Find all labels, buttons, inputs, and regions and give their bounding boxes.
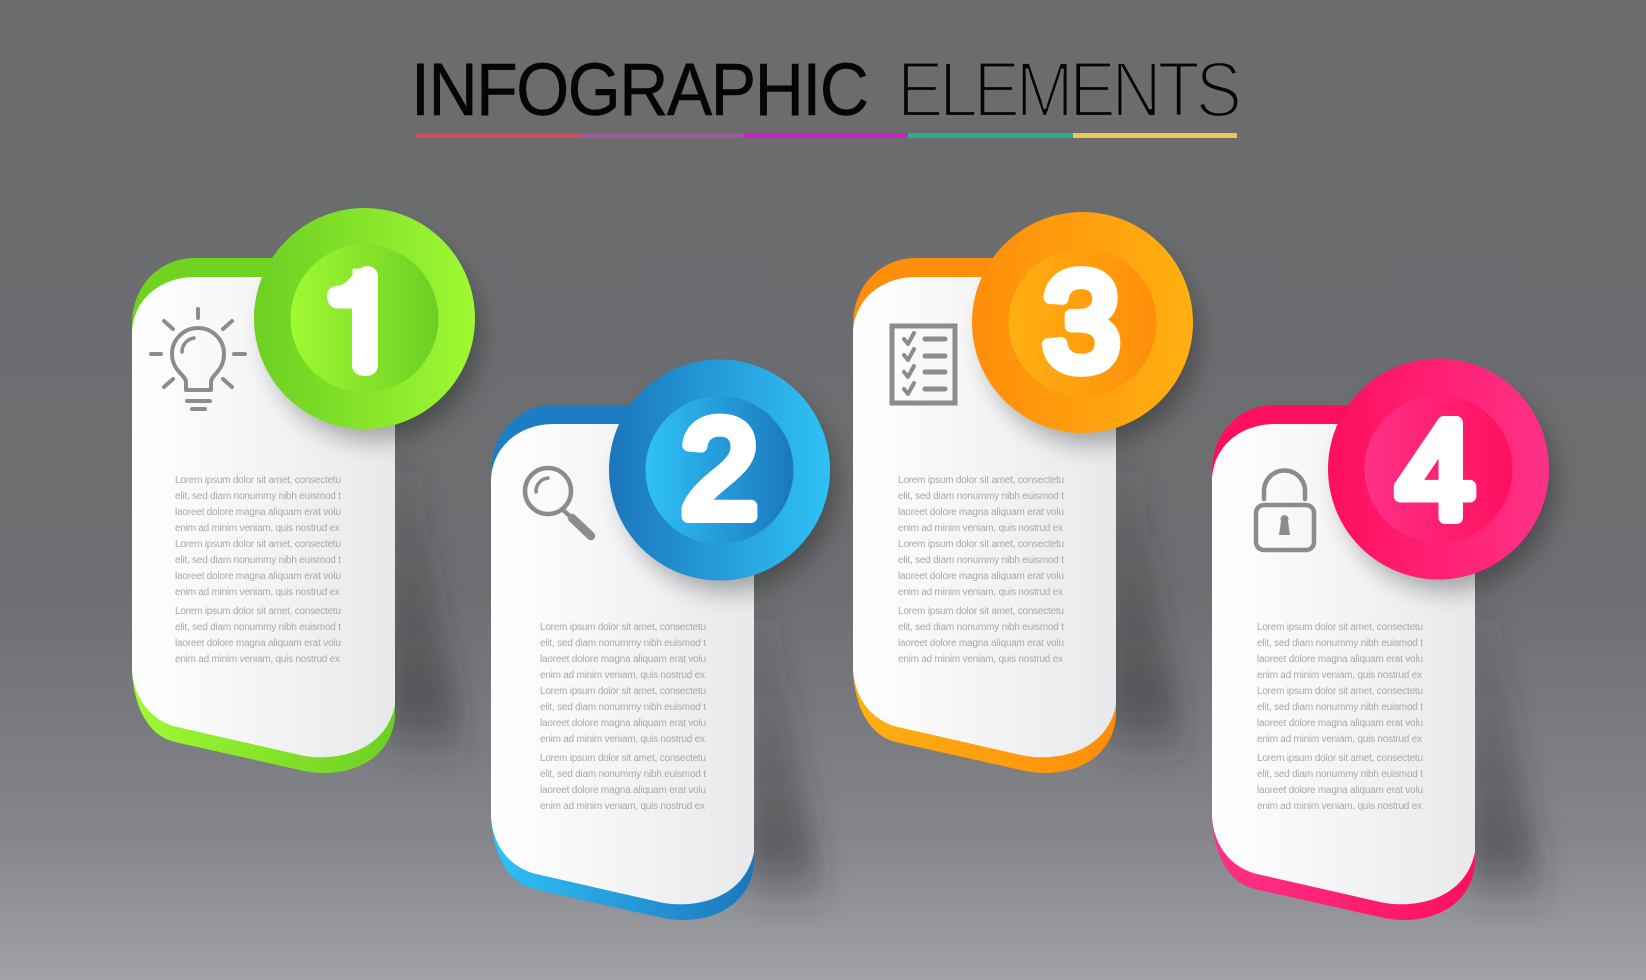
text block: elit, sed diam nonummy nibh euismod t bbox=[175, 555, 341, 566]
text block: enim ad minim veniam, quis nostrud ex bbox=[898, 587, 1063, 598]
text block: Lorem ipsum dolor sit amet, consectetu bbox=[1257, 753, 1423, 764]
panel white face bbox=[132, 277, 395, 757]
text block: enim ad minim veniam, quis nostrud ex bbox=[1257, 801, 1422, 812]
text block: elit, sed diam nonummy nibh euismod t bbox=[175, 491, 341, 502]
text block: laoreet dolore magna aliquam erat volu bbox=[175, 571, 341, 582]
panel bottom edge bbox=[853, 650, 1116, 773]
panel white face bbox=[491, 424, 754, 904]
text block: elit, sed diam nonummy nibh euismod t bbox=[898, 491, 1064, 502]
panel shadow bbox=[744, 587, 829, 917]
badge: number 1: 1 bbox=[320, 246, 397, 400]
text block: Lorem ipsum dolor sit amet, consectetu bbox=[898, 606, 1064, 617]
text block: Lorem ipsum dolor sit amet, consectetu bbox=[540, 753, 706, 764]
text block: Lorem ipsum dolor sit amet, consectetu bbox=[175, 539, 341, 550]
text block bbox=[898, 475, 1064, 665]
text block: laoreet dolore magna aliquam erat volu bbox=[898, 638, 1064, 649]
badge: number 4 bbox=[1328, 358, 1554, 591]
text block bbox=[540, 622, 706, 812]
text block: laoreet dolore magna aliquam erat volu bbox=[1257, 718, 1423, 729]
panel coloured back bbox=[491, 405, 754, 920]
text block: laoreet dolore magna aliquam erat volu bbox=[540, 654, 706, 665]
text block: Lorem ipsum dolor sit amet, consectetu bbox=[1257, 686, 1423, 697]
text block: laoreet dolore magna aliquam erat volu bbox=[540, 718, 706, 729]
panel bottom edge bbox=[1212, 797, 1475, 920]
icon: light bulb bbox=[151, 309, 245, 409]
panel shadow bbox=[1106, 440, 1191, 770]
text block: elit, sed diam nonummy nibh euismod t bbox=[898, 622, 1064, 633]
text block: enim ad minim veniam, quis nostrud ex bbox=[898, 654, 1063, 665]
panel: step 2 bbox=[491, 405, 829, 920]
panel white face bbox=[853, 277, 1116, 757]
panel bottom edge bbox=[491, 797, 754, 920]
text block: enim ad minim veniam, quis nostrud ex bbox=[1257, 670, 1422, 681]
text block: laoreet dolore magna aliquam erat volu bbox=[1257, 785, 1423, 796]
text block: enim ad minim veniam, quis nostrud ex bbox=[175, 654, 340, 665]
badge: number 2 bbox=[609, 360, 836, 592]
badge: number 3: 3 bbox=[1043, 245, 1120, 399]
text block: elit, sed diam nonummy nibh euismod t bbox=[898, 555, 1064, 566]
text block: elit, sed diam nonummy nibh euismod t bbox=[540, 638, 706, 649]
title word: ELEMENTS: ELEMENTS bbox=[897, 46, 1240, 134]
icon: checklist bbox=[892, 326, 955, 403]
text block: laoreet dolore magna aliquam erat volu bbox=[898, 571, 1064, 582]
text block: elit, sed diam nonummy nibh euismod t bbox=[1257, 769, 1423, 780]
badge: number 3 bbox=[972, 212, 1198, 444]
text block: enim ad minim veniam, quis nostrud ex bbox=[540, 734, 705, 745]
text block: Lorem ipsum dolor sit amet, consectetu bbox=[898, 475, 1064, 486]
badge: number 2: 2 bbox=[681, 392, 758, 546]
text block: elit, sed diam nonummy nibh euismod t bbox=[540, 702, 706, 713]
text block: laoreet dolore magna aliquam erat volu bbox=[175, 638, 341, 649]
text block: Lorem ipsum dolor sit amet, consectetu bbox=[898, 539, 1064, 550]
text block: laoreet dolore magna aliquam erat volu bbox=[898, 507, 1064, 518]
text block: enim ad minim veniam, quis nostrud ex bbox=[175, 523, 340, 534]
text block: elit, sed diam nonummy nibh euismod t bbox=[175, 622, 341, 633]
panel shadow bbox=[385, 440, 470, 770]
text block: Lorem ipsum dolor sit amet, consectetu bbox=[1257, 622, 1423, 633]
title underline bbox=[416, 133, 1237, 138]
panel bottom edge bbox=[132, 650, 395, 773]
icon: magnifying glass bbox=[525, 468, 591, 536]
text block: enim ad minim veniam, quis nostrud ex bbox=[1257, 734, 1422, 745]
text block: elit, sed diam nonummy nibh euismod t bbox=[1257, 638, 1423, 649]
text block: Lorem ipsum dolor sit amet, consectetu bbox=[540, 622, 706, 633]
panel coloured back bbox=[132, 258, 395, 773]
panel white face bbox=[1212, 424, 1475, 904]
panel shadow bbox=[1465, 587, 1550, 917]
panel coloured back bbox=[853, 258, 1116, 773]
text block: Lorem ipsum dolor sit amet, consectetu bbox=[175, 475, 341, 486]
panel: step 1 bbox=[132, 258, 470, 773]
panel coloured back bbox=[1212, 405, 1475, 920]
panel: step 4 bbox=[1212, 405, 1550, 920]
text block: Lorem ipsum dolor sit amet, consectetu bbox=[540, 686, 706, 697]
text block: enim ad minim veniam, quis nostrud ex bbox=[540, 801, 705, 812]
text block: laoreet dolore magna aliquam erat volu bbox=[540, 785, 706, 796]
text block bbox=[175, 475, 341, 665]
panel: step 3 bbox=[853, 258, 1191, 773]
icon: padlock bbox=[1256, 470, 1314, 550]
text block: Lorem ipsum dolor sit amet, consectetu bbox=[175, 606, 341, 617]
text block: enim ad minim veniam, quis nostrud ex bbox=[175, 587, 340, 598]
title word: INFOGRAPHIC: INFOGRAPHIC bbox=[411, 49, 868, 132]
text block: laoreet dolore magna aliquam erat volu bbox=[175, 507, 341, 518]
title bbox=[411, 46, 1240, 134]
badge: number 1 bbox=[254, 208, 480, 440]
text block: laoreet dolore magna aliquam erat volu bbox=[1257, 654, 1423, 665]
text block bbox=[1257, 622, 1423, 812]
text block: enim ad minim veniam, quis nostrud ex bbox=[540, 670, 705, 681]
text block: enim ad minim veniam, quis nostrud ex bbox=[898, 523, 1063, 534]
text block: elit, sed diam nonummy nibh euismod t bbox=[1257, 702, 1423, 713]
badge: number 4: 4 bbox=[1397, 394, 1474, 548]
text block: elit, sed diam nonummy nibh euismod t bbox=[540, 769, 706, 780]
